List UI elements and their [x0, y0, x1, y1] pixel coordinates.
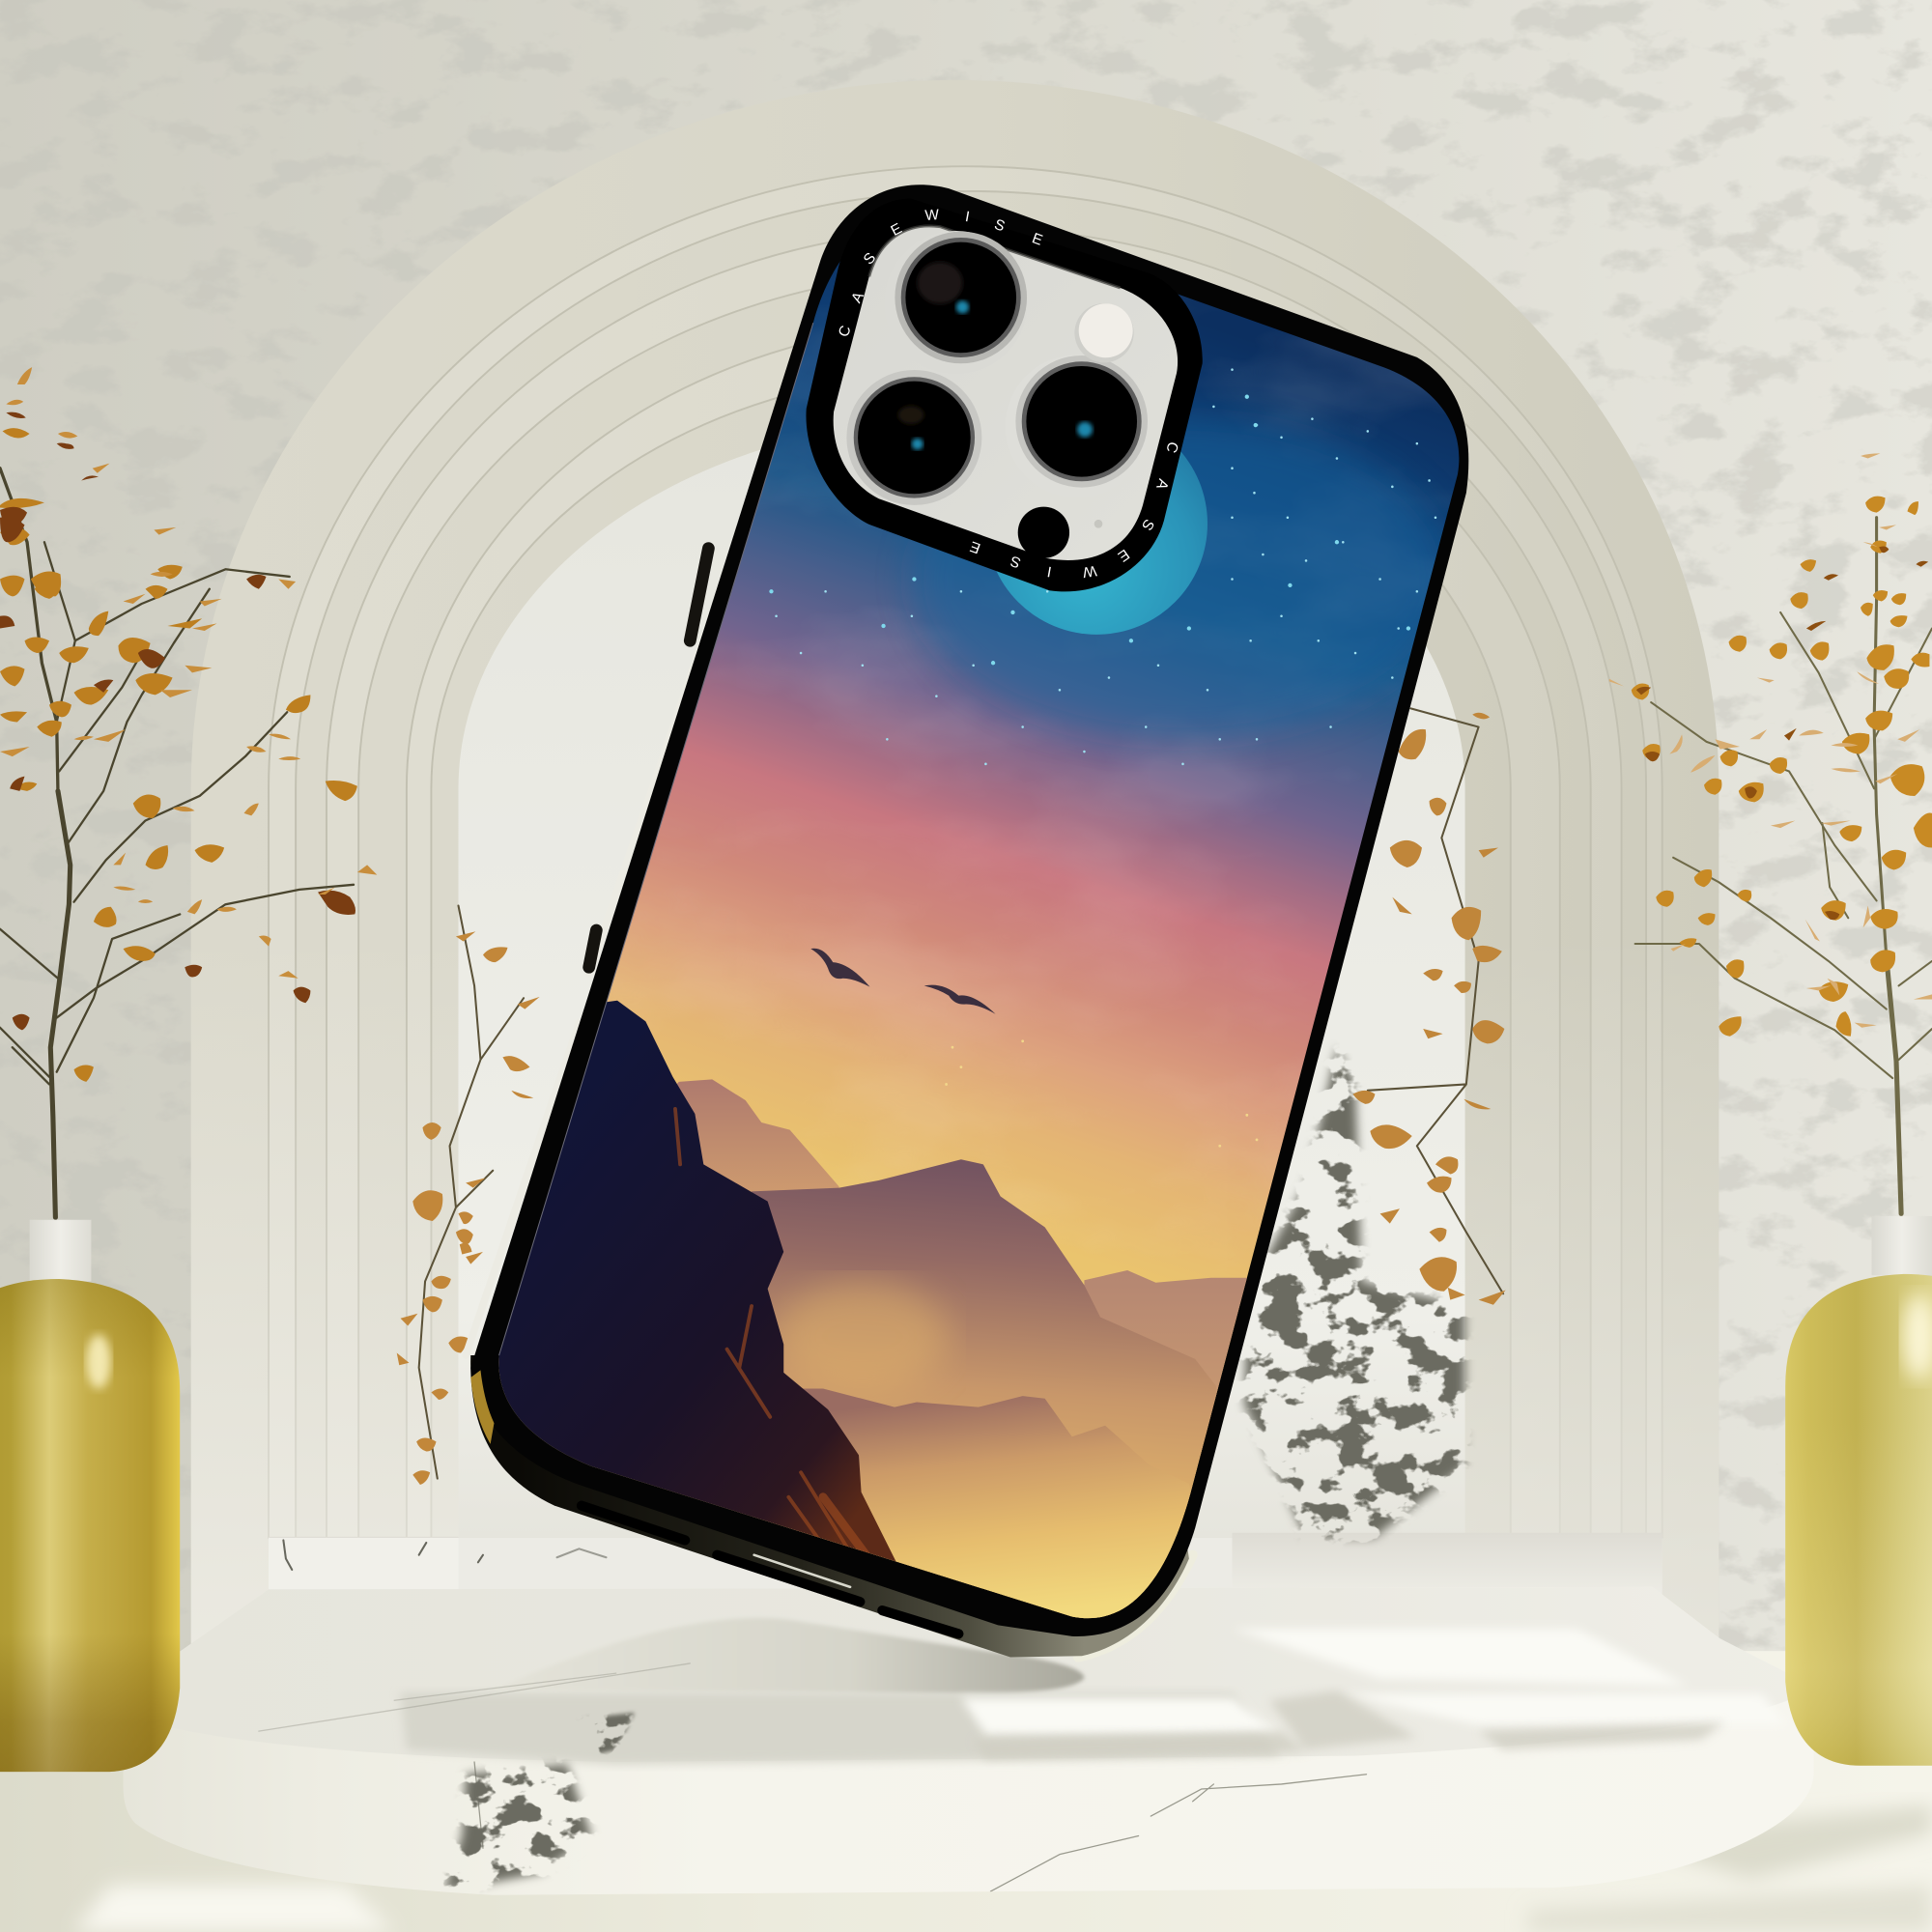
podium top surface	[124, 1587, 1810, 1762]
flash	[1074, 303, 1134, 362]
ports	[582, 1506, 958, 1634]
brand text: E	[968, 538, 982, 556]
brand text: S	[1009, 553, 1023, 571]
right tree	[1609, 453, 1932, 1213]
brand text: I	[1046, 563, 1053, 580]
lens right	[1006, 355, 1149, 497]
vine behind phone right	[1353, 708, 1506, 1305]
brand text: A	[848, 289, 867, 305]
island black frame	[806, 199, 1203, 591]
phone shadow on podium	[493, 1618, 1084, 1693]
shaded band on podium	[401, 1693, 1282, 1765]
phone side edge highlight	[466, 443, 770, 1355]
left vase	[0, 1220, 180, 1772]
brand text: W	[924, 207, 940, 224]
lidar	[1018, 507, 1069, 558]
birds	[810, 949, 996, 1014]
right vase highlight	[1902, 1293, 1932, 1380]
port highlight	[754, 1555, 850, 1587]
brand text: A	[1152, 477, 1172, 493]
camera plate	[834, 226, 1178, 560]
microphone	[1094, 520, 1102, 528]
case underside	[470, 1355, 1189, 1658]
lens top	[885, 231, 1028, 374]
mountain right	[1084, 1270, 1257, 1454]
lens lower left	[846, 370, 981, 505]
marble veining in the opening	[1238, 1047, 1472, 1545]
art inner edge	[499, 323, 813, 1355]
arch opening	[458, 419, 1465, 1538]
right vase neck	[1872, 1216, 1932, 1275]
vine behind phone left	[397, 906, 540, 1485]
brand text: S	[992, 216, 1007, 235]
camera island	[806, 199, 1203, 591]
brand text	[836, 207, 1181, 581]
left vase body	[0, 1279, 180, 1772]
podium front	[124, 1587, 1814, 1895]
brand text: W	[1081, 562, 1097, 581]
left vine leaves	[397, 931, 540, 1485]
left tree leaves	[0, 367, 377, 1082]
right vase	[1785, 1216, 1932, 1766]
phone case rim	[470, 185, 1468, 1636]
floor	[0, 1651, 1932, 1932]
lit lower part of the steps	[191, 936, 1719, 1663]
brand text: E	[1115, 546, 1132, 564]
left tree	[0, 367, 377, 1217]
mountain low	[788, 1389, 1233, 1651]
niche back wall strip	[269, 1538, 1662, 1602]
side buttons	[589, 549, 708, 967]
brand text: S	[861, 249, 879, 268]
left vase neck	[30, 1220, 91, 1282]
left vase highlight	[86, 1334, 111, 1389]
marble patches	[442, 1710, 636, 1890]
phone artwork	[498, 261, 1459, 1619]
podium veins	[259, 1663, 1367, 1891]
small marble marks on back wall	[283, 1540, 607, 1570]
gold reflection on corner	[470, 1370, 494, 1444]
brand text: C	[1162, 440, 1181, 455]
floor light and shadow	[74, 1805, 1932, 1932]
brand text: I	[964, 209, 971, 225]
left tree branches	[0, 469, 354, 1217]
floating phone	[464, 185, 1468, 1658]
right vine leaves	[1353, 713, 1506, 1305]
marble podium	[124, 1587, 1814, 1897]
stars	[771, 370, 1445, 1540]
blue glow	[912, 419, 1454, 739]
stepped arch niche	[191, 80, 1719, 1663]
brand text: E	[1030, 230, 1044, 249]
moon	[997, 452, 1208, 635]
right vine stem	[1368, 708, 1503, 1293]
window light patches	[961, 1629, 1786, 1735]
shadow bars on podium	[974, 1690, 1725, 1759]
right tree leaves	[1609, 453, 1932, 1037]
pale side of the case at lower right	[1078, 1555, 1193, 1658]
right vase body	[1785, 1274, 1932, 1766]
sky gradient	[498, 261, 1459, 1619]
mountain far	[666, 1079, 839, 1233]
cliff	[370, 1001, 912, 1627]
cliff rust highlights	[675, 1109, 868, 1559]
brand text: C	[836, 324, 855, 339]
right tree branches	[1635, 518, 1932, 1213]
fog in middle	[777, 1282, 949, 1392]
mountain middle	[752, 1159, 1233, 1627]
brand text: S	[1138, 516, 1157, 533]
left vine stem	[419, 906, 524, 1479]
brand text: E	[889, 220, 905, 240]
